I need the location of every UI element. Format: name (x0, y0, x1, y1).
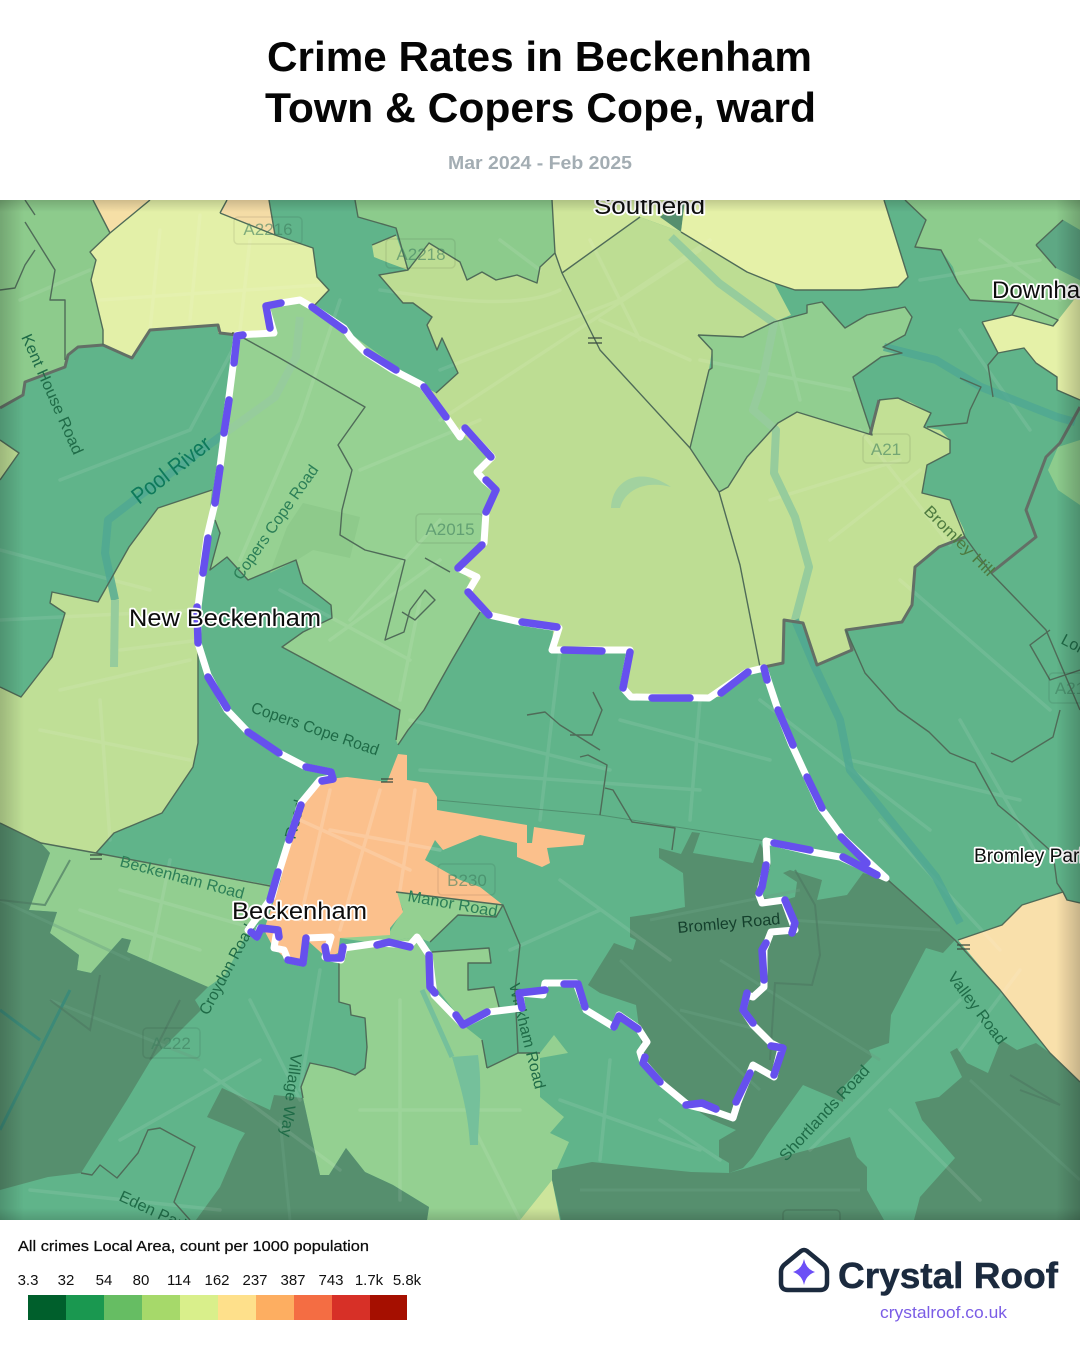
title: Town & Copers Cope, ward (265, 84, 816, 131)
legend scale labels: 1.7k (355, 1272, 384, 1289)
area: pale yellow north-west (90, 200, 329, 358)
area: slightly darker block in ward (270, 508, 352, 573)
shield: A21 (863, 434, 910, 463)
map edge vignette (0, 200, 1080, 1220)
road labels (17, 332, 1080, 1236)
road network in dark areas (52, 892, 796, 952)
place label: Beckenham: Beckenham (232, 898, 367, 925)
shield: A2015: A2015 (425, 520, 475, 539)
area: pale yellow north (681, 200, 908, 290)
river: Ravensbourne east branch (884, 347, 1075, 422)
subtitle: date range: Mar 2024 - Feb 2025 (448, 153, 632, 173)
logo: Crystal Roof (781, 1250, 1059, 1322)
river: Pool River west section (105, 433, 225, 600)
area: dark green south centre (196, 1088, 429, 1220)
area: light green Beckenham Road (29, 843, 270, 987)
area: yellow green park (372, 217, 791, 697)
wordmark: Crystal Roof (838, 1255, 1059, 1296)
area: light green Manor Road strip (339, 892, 503, 943)
road label: Beckenham Road: Beckenham Road (118, 853, 246, 903)
road label: Village Way: Village Way (277, 1053, 304, 1138)
legend scale labels: 80 (133, 1272, 149, 1289)
lake in park (611, 476, 671, 508)
road label: Wickham Road: Wickham Road (505, 982, 548, 1091)
shield: A21: A21 (871, 440, 901, 459)
railway line east of town centre (437, 800, 766, 841)
area: yellow green east (719, 398, 965, 667)
shield: A2216: A2216 (243, 220, 293, 239)
river: Pool River north section in ward (225, 317, 300, 433)
road label: Croydon Road: Croydon Road (197, 922, 258, 1018)
area: dark green bottom strip (552, 1137, 884, 1220)
road label: Eden Park: Eden Park (116, 1188, 193, 1236)
road label: Shortlands Road: Shortlands Road (776, 1062, 873, 1165)
legend scale labels: 3.3 (18, 1272, 38, 1289)
river: Ravensbourne south (795, 620, 960, 923)
station markers (90, 333, 970, 949)
lake south (452, 1055, 480, 1145)
website link: crystalroof.co.uk (880, 1304, 1008, 1322)
road label: Copers Cope Road south: Copers Cope Road (249, 700, 381, 759)
legend (18, 1238, 422, 1320)
map panel: choropleth of crime rates (0, 193, 1080, 1236)
area: dark green south east (914, 1040, 1080, 1220)
road label: Bromley Hill: Bromley Hill (920, 503, 997, 580)
place labels (129, 193, 1080, 925)
shield: A222: A222 (151, 1034, 191, 1053)
legend scale labels: 387 (280, 1272, 306, 1289)
shield: B230 (438, 864, 495, 895)
area: light green east cluster (690, 302, 912, 492)
ward boundary: white line with purple dashes (197, 300, 886, 1118)
title (265, 33, 816, 131)
road label: Valley Road: Valley Road (944, 969, 1009, 1048)
area: light green north-west (0, 200, 110, 408)
road shields (143, 217, 1080, 1230)
rivers (0, 237, 1075, 1145)
ward outline white (198, 300, 886, 1118)
legend scale labels: 162 (204, 1272, 230, 1289)
legend scale labels: 114 (167, 1272, 191, 1289)
legend scale labels: 743 (318, 1272, 344, 1289)
legend scale labels: 32 (58, 1272, 74, 1289)
legend scale labels: 237 (242, 1272, 268, 1289)
place label: Southend: Southend (594, 193, 705, 220)
legend title: All crimes Local Area, count per 1000 population (18, 1238, 369, 1255)
shield: A2218 (386, 239, 455, 268)
area: pale wedge at south (520, 1180, 560, 1220)
area: tan east (958, 892, 1080, 1082)
area: pale yellow far north east (982, 292, 1080, 400)
area: dark green top-right diamond (1036, 220, 1080, 280)
area: dark green sliver Southend (660, 204, 684, 232)
shield: A2015 (416, 514, 483, 543)
road label: Copers Cope Road north: Copers Cope Road (230, 462, 322, 583)
place label: New Beckenham: New Beckenham (129, 605, 321, 632)
shield: A2216 (234, 217, 302, 244)
stream west of lake (422, 990, 452, 1057)
road label: Kent House Road: Kent House Road (17, 332, 86, 457)
boundaries (0, 200, 1080, 1220)
legend scale labels: 54 (96, 1272, 112, 1289)
legend scale labels (18, 1272, 422, 1289)
road network (0, 215, 1060, 1220)
ward dashes purple (197, 303, 877, 1109)
river: Pool River south section (114, 600, 115, 667)
shield: bottom edge (783, 1210, 840, 1230)
water label: Pool River: Pool River (126, 430, 216, 509)
river: Ravensbourne north (671, 237, 809, 620)
area: yellow green west edge sliver (0, 441, 18, 478)
shield: A222 (143, 1028, 200, 1058)
area: light green east of river (432, 948, 499, 1022)
stream in south west (0, 990, 70, 1130)
area: light green right edge (1048, 440, 1080, 505)
area: ward north light green (210, 300, 497, 745)
area: Beckenham town centre highest crime, orange (264, 754, 585, 962)
road label: Manor Road: Manor Road (406, 888, 499, 921)
area: pale green Southend (552, 200, 685, 273)
area: dark green south west (0, 823, 208, 1190)
icon: house with sparkle (781, 1250, 827, 1290)
area: light green south park (301, 937, 569, 1220)
area: dark green Bromley Road (588, 832, 955, 1173)
area: light green north east (905, 200, 1080, 326)
shield: A21 east (1049, 673, 1080, 703)
legend scale labels: 5.8k (393, 1272, 422, 1289)
area: yellow green lower west (0, 490, 212, 853)
road label: Road, behind ward boundary: Road (282, 798, 309, 841)
shield: A2218: A2218 (396, 245, 446, 264)
road label: Bromley Road: Bromley Road (677, 911, 781, 937)
title: Crime Rates in Beckenham (267, 33, 812, 80)
shield: B230: B230 (447, 871, 487, 890)
area: tan north-west (93, 200, 150, 233)
area: tan top centre (220, 200, 275, 235)
area: light green north centre (355, 200, 555, 283)
legend colour ramp (28, 1295, 407, 1320)
